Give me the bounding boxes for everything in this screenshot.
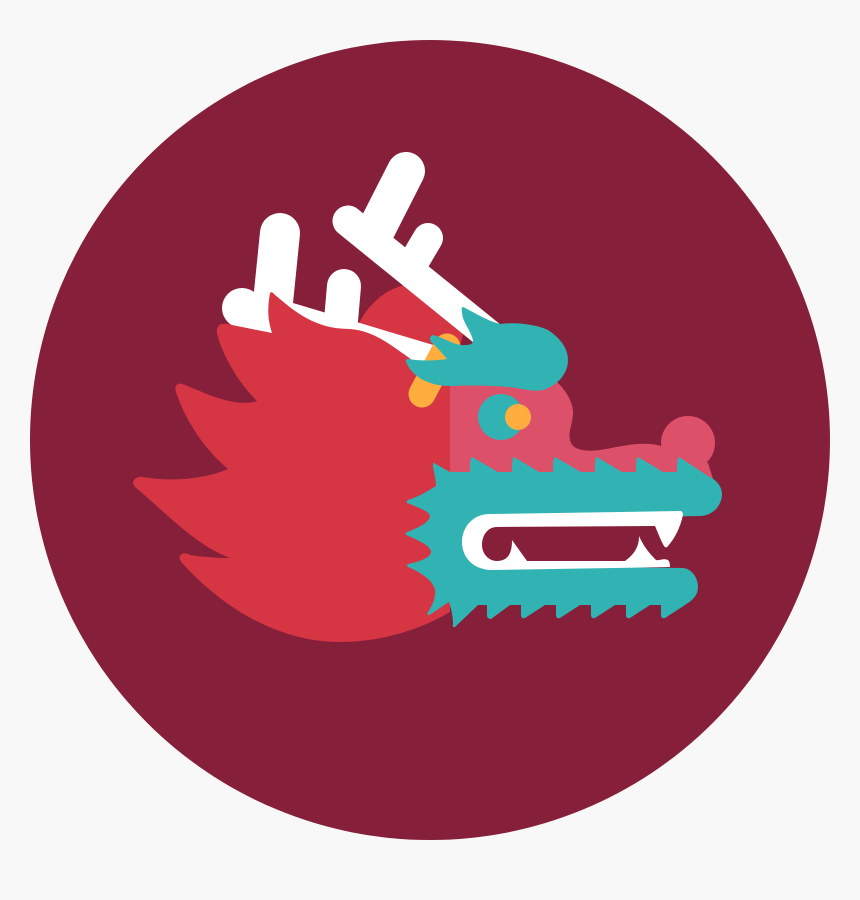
- white mouth and teeth: [462, 511, 683, 570]
- teal brow: [406, 307, 568, 391]
- eye socket: [478, 394, 524, 440]
- lower antler: [222, 233, 440, 368]
- eye: [478, 394, 531, 440]
- teal jaws with spikes: [406, 457, 722, 627]
- orange horn bar: [422, 347, 447, 394]
- red mane: [133, 292, 450, 642]
- icon: white antlers: [222, 171, 490, 368]
- upper antler: [348, 171, 490, 336]
- nose bump: [661, 416, 715, 470]
- pink snout and face: [450, 380, 715, 482]
- dragon head: [133, 171, 722, 642]
- eye pupil: [505, 404, 531, 430]
- red back of head dome: [350, 285, 465, 390]
